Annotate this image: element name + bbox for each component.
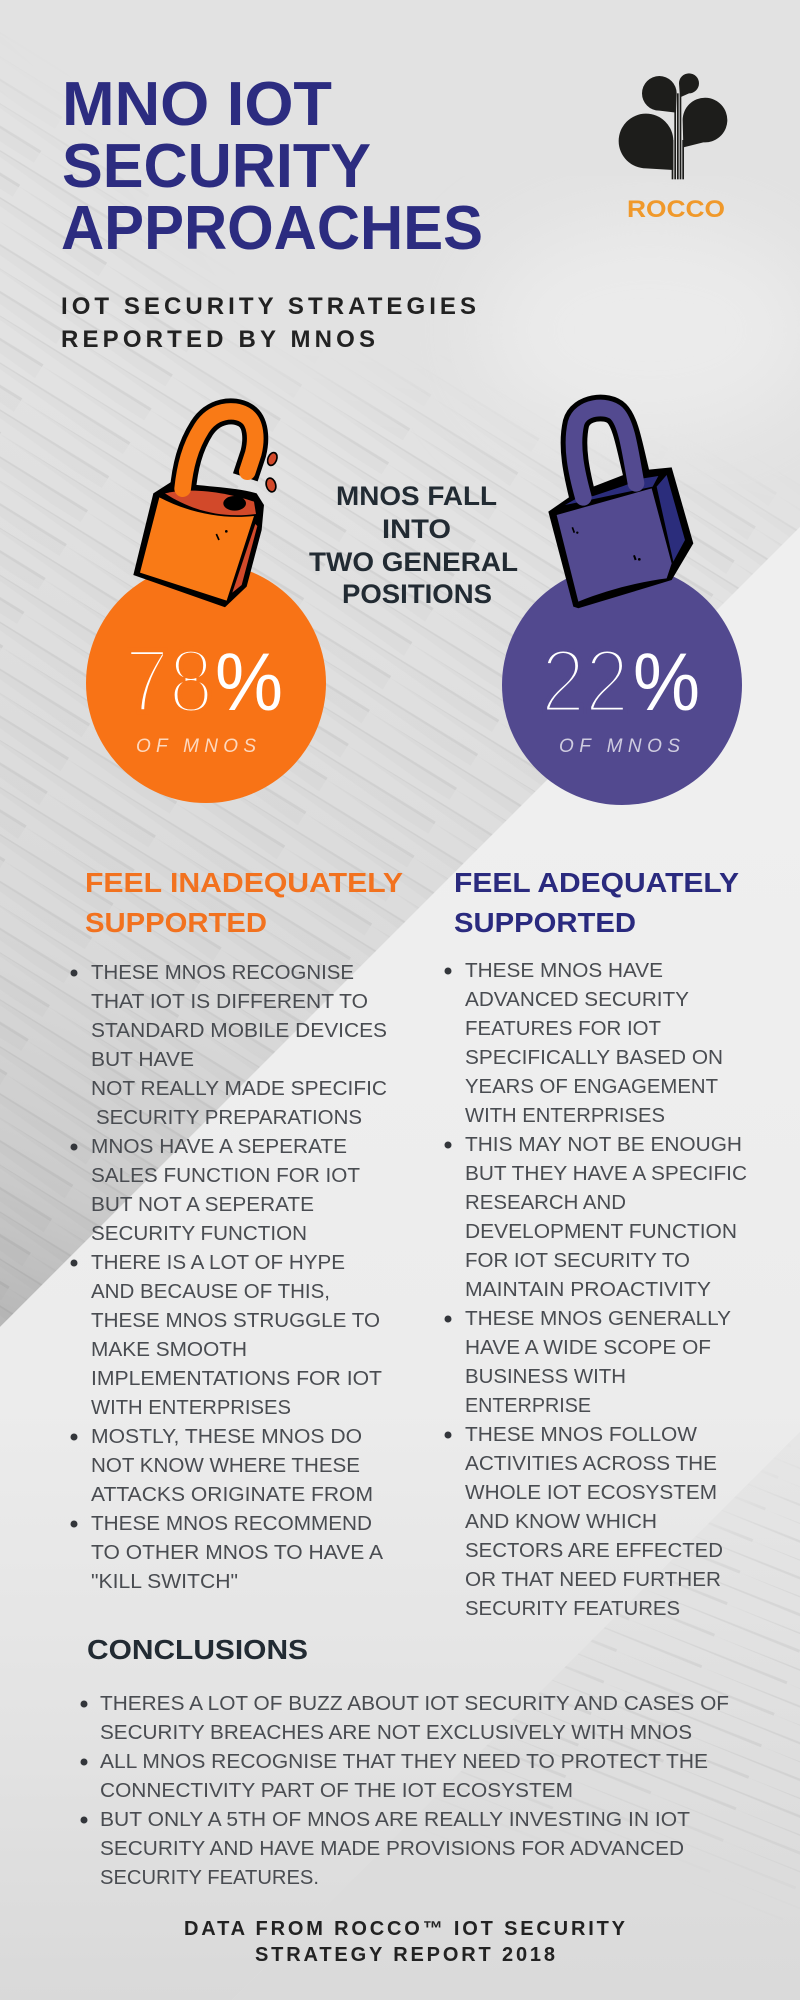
logo wordmark: ROCCO xyxy=(627,196,725,223)
bullet list: ADVANCED SECURITY xyxy=(465,989,689,1011)
heading: CONCLUSIONS xyxy=(87,1634,308,1665)
bullet list: WITH ENTERPRISES xyxy=(91,1397,291,1419)
heading: SUPPORTED xyxy=(454,907,636,938)
bullet list: SECURITY FUNCTION xyxy=(91,1223,307,1245)
bullet list: SALES FUNCTION FOR IOT xyxy=(91,1165,360,1187)
heading: FEEL ADEQUATELY xyxy=(454,867,739,898)
bullet list: FEATURES FOR IOT xyxy=(465,1018,661,1040)
bullet list: IMPLEMENTATIONS FOR IOT xyxy=(91,1368,382,1390)
bullet list: THESE MNOS GENERALLY xyxy=(465,1308,731,1330)
value: 22% xyxy=(541,632,700,732)
value: 78%: % xyxy=(215,637,283,728)
bullet list: YEARS OF ENGAGEMENT xyxy=(465,1076,718,1098)
logo: Rocco xyxy=(619,73,727,223)
bullet list: SECURITY FEATURES. xyxy=(100,1867,319,1889)
caption: OF MNOS xyxy=(136,736,256,757)
bullet list: TO OTHER MNOS TO HAVE A xyxy=(91,1542,384,1564)
bullet list: SPECIFICALLY BASED ON xyxy=(465,1047,723,1069)
bullet list: MNOS HAVE A SEPERATE xyxy=(91,1136,347,1158)
source credit xyxy=(184,1918,626,1966)
subtitle: IOT SECURITY STRATEGIES xyxy=(61,293,476,320)
bullet list: BUT ONLY A 5TH OF MNOS ARE REALLY INVESTING IN IOT xyxy=(100,1809,690,1831)
heading xyxy=(85,867,403,938)
value: 22%: 22 xyxy=(541,632,629,732)
bullet list: THESE MNOS RECOGNISE xyxy=(91,962,354,984)
panel: conclusions xyxy=(80,1634,729,1889)
bullet list: RESEARCH AND xyxy=(465,1192,626,1214)
bullet list: SECURITY FEATURES xyxy=(465,1598,680,1620)
panel: 78 percent stat xyxy=(86,411,326,803)
source credit: DATA FROM ROCCO™ IOT SECURITY xyxy=(184,1918,626,1940)
central statement: POSITIONS xyxy=(342,579,492,609)
bullet list: SECTORS ARE EFFECTED xyxy=(465,1540,723,1562)
bullet list: HAVE A WIDE SCOPE OF xyxy=(465,1337,711,1359)
bullet list: SECURITY AND HAVE MADE PROVISIONS FOR ADVANCED xyxy=(100,1838,684,1860)
bullet list: BUSINESS WITH xyxy=(465,1366,626,1388)
bullet list: MAKE SMOOTH xyxy=(91,1339,247,1361)
central statement xyxy=(309,481,518,609)
bullet list: THERE IS A LOT OF HYPE xyxy=(91,1252,345,1274)
value: 78% xyxy=(125,632,283,732)
value: 22%: % xyxy=(633,637,700,728)
bullet list: BUT HAVE xyxy=(91,1049,194,1071)
title xyxy=(61,70,483,263)
bullet list: WITH ENTERPRISES xyxy=(465,1105,665,1127)
bullet list: SECURITY PREPARATIONS xyxy=(96,1107,362,1129)
icon: closed purple padlock xyxy=(548,408,693,608)
bullet list xyxy=(444,960,747,1620)
bullet list: NOT REALLY MADE SPECIFIC xyxy=(91,1078,387,1100)
bullet list: ALL MNOS RECOGNISE THAT THEY NEED TO PROTECT THE xyxy=(100,1751,708,1773)
heading: SUPPORTED xyxy=(85,907,267,938)
bullet list xyxy=(70,962,387,1593)
bullet list: ACTIVITIES ACROSS THE xyxy=(465,1453,717,1475)
bullet list: CONNECTIVITY PART OF THE IOT ECOSYSTEM xyxy=(100,1780,573,1802)
panel: feel adequately supported xyxy=(444,867,747,1620)
bullet list: THESE MNOS RECOMMEND xyxy=(91,1513,372,1535)
bullet list: MOSTLY, THESE MNOS DO xyxy=(91,1426,362,1448)
central statement: MNOS FALL xyxy=(336,481,497,511)
bullet list: THESE MNOS FOLLOW xyxy=(465,1424,697,1446)
caption: OF MNOS xyxy=(559,736,680,757)
bullet list: THAT IOT IS DIFFERENT TO xyxy=(91,991,368,1013)
central statement: TWO GENERAL xyxy=(309,547,518,577)
orange circle xyxy=(86,563,326,803)
panel: feel inadequately supported xyxy=(70,867,403,1593)
source credit: STRATEGY REPORT 2018 xyxy=(255,1944,555,1966)
bullet list: THESE MNOS STRUGGLE TO xyxy=(91,1310,380,1332)
title: APPROACHES xyxy=(61,194,483,263)
bullet list: "KILL SWITCH" xyxy=(91,1571,238,1593)
bullet list: DEVELOPMENT FUNCTION xyxy=(465,1221,737,1243)
bullet list: NOT KNOW WHERE THESE xyxy=(91,1455,360,1477)
bullet list: WHOLE IOT ECOSYSTEM xyxy=(465,1482,717,1504)
bullet list xyxy=(80,1693,729,1889)
bullet list: SECURITY BREACHES ARE NOT EXCLUSIVELY WITH MNOS xyxy=(100,1722,692,1744)
bullet list: THERES A LOT OF BUZZ ABOUT IOT SECURITY AND CASES OF xyxy=(100,1693,729,1715)
bullet list: AND KNOW WHICH xyxy=(465,1511,657,1533)
bullet list: ATTACKS ORIGINATE FROM xyxy=(91,1484,373,1506)
bullet list: FOR IOT SECURITY TO xyxy=(465,1250,690,1272)
title: MNO IOT xyxy=(62,70,332,139)
bullet list: AND BECAUSE OF THIS, xyxy=(91,1281,330,1303)
bullet list: BUT THEY HAVE A SPECIFIC xyxy=(465,1163,747,1185)
title: SECURITY xyxy=(62,132,371,201)
icon: open orange padlock xyxy=(133,411,279,607)
bullet list: MAINTAIN PROACTIVITY xyxy=(465,1279,711,1301)
bullet list: OR THAT NEED FURTHER xyxy=(465,1569,721,1591)
subtitle xyxy=(61,293,476,353)
bullet list: THIS MAY NOT BE ENOUGH xyxy=(465,1134,742,1156)
bullet list: THESE MNOS HAVE xyxy=(465,960,663,982)
bullet list: STANDARD MOBILE DEVICES xyxy=(91,1020,387,1042)
heading: FEEL INADEQUATELY xyxy=(85,867,403,898)
subtitle: REPORTED BY MNOS xyxy=(61,326,375,353)
purple circle xyxy=(502,565,742,805)
value: 78%: 78 xyxy=(125,632,213,732)
panel: 22 percent stat xyxy=(502,408,742,805)
central statement: INTO xyxy=(382,514,451,544)
logo icon: tree of leaves xyxy=(619,73,727,179)
bullet list: BUT NOT A SEPERATE xyxy=(91,1194,314,1216)
heading xyxy=(454,867,739,938)
bullet list: ENTERPRISE xyxy=(465,1395,591,1417)
